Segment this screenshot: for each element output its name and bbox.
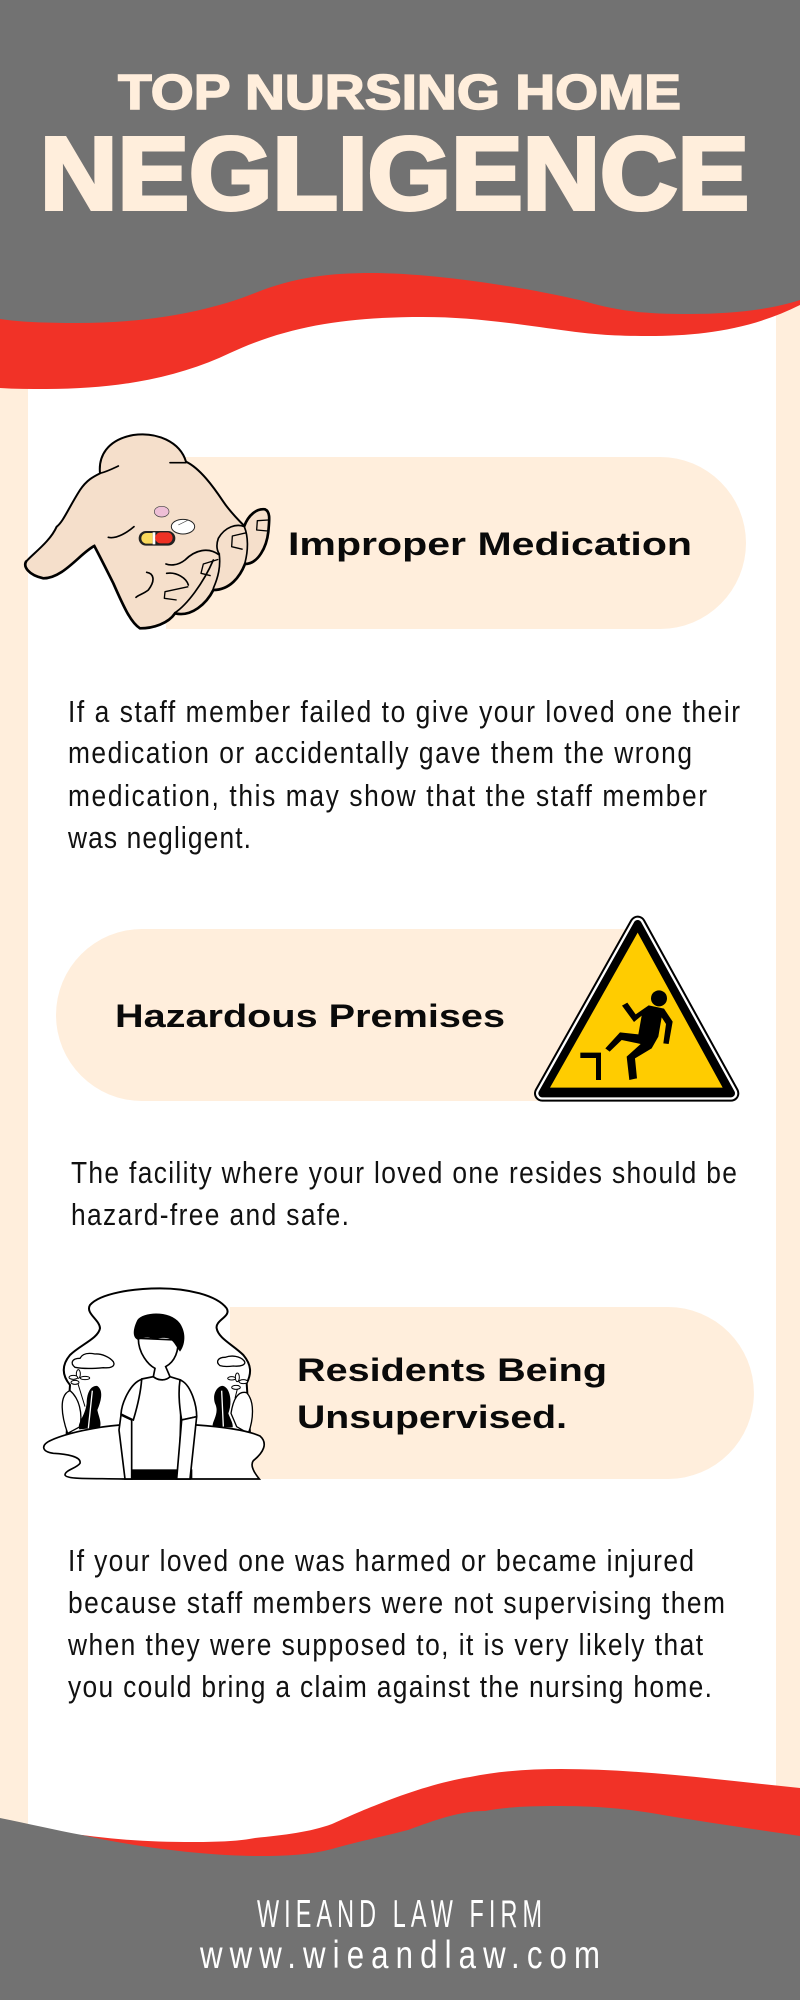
title (40, 66, 749, 231)
text block: hazardous premises: hazard-free and safe. (71, 1198, 349, 1233)
text block: residents being unsupervised: If your loved one was harmed or became injured (68, 1544, 694, 1579)
panel: improper medication (25, 434, 746, 856)
text block: improper medication: was negligent. (67, 821, 251, 856)
footer text: WIEAND LAW FIRM (257, 1892, 542, 1935)
heading pill: improper medication (166, 457, 746, 629)
panel: hazardous premises (56, 924, 737, 1233)
heading: residents being unsupervised: Residents Being (297, 1352, 607, 1388)
icon: falling hazard triangle (542, 924, 731, 1093)
footer text: www.wieandlaw.com (199, 1934, 600, 1977)
text block: hazardous premises: The facility where your loved one resides should be (71, 1156, 737, 1191)
text block: improper medication: medication, this may show that the staff member (68, 779, 707, 814)
footer banner with wave (0, 1769, 800, 2000)
text block: residents being unsupervised: because staff members were not supervising them (68, 1586, 725, 1621)
title: TOP NURSING HOME (118, 66, 681, 120)
text block: residents being unsupervised (67, 1544, 725, 1705)
icon: person alone outdoors (44, 1288, 264, 1479)
heading: hazardous premises: Hazardous Premises (115, 998, 505, 1034)
text block: improper medication: If a staff member failed to give your loved one their (68, 695, 740, 730)
heading pill: hazardous premises (56, 929, 640, 1101)
heading pill: residents being unsupervised (230, 1307, 754, 1479)
icon: hand holding pills (25, 434, 269, 628)
panel: residents being unsupervised (44, 1288, 754, 1705)
heading: residents being unsupervised: Unsupervised. (297, 1399, 567, 1435)
text block: hazardous premises (71, 1156, 737, 1233)
text block: residents being unsupervised: when they were supposed to, it is very likely that (67, 1628, 703, 1663)
heading: improper medication: Improper Medication (288, 526, 692, 562)
text block: residents being unsupervised: you could bring a claim against the nursing home. (68, 1670, 712, 1705)
text block: improper medication: medication or accidentally gave them the wrong (68, 736, 692, 771)
heading: residents being unsupervised (297, 1352, 607, 1435)
footer text (199, 1892, 600, 1977)
title: NEGLIGENCE (40, 116, 749, 231)
header banner with wave (0, 0, 800, 389)
text block: improper medication (67, 695, 740, 856)
